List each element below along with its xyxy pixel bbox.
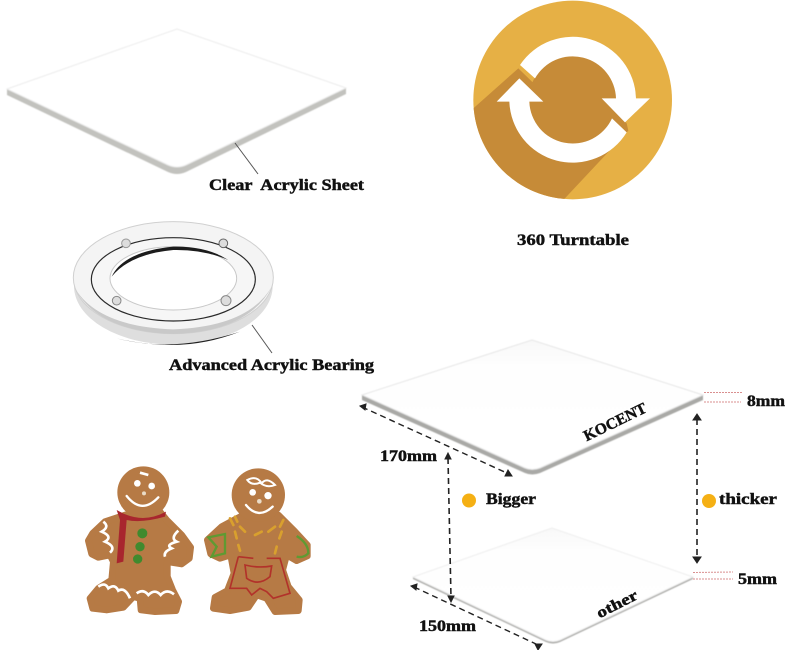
- arrow: 170mm width: [360, 404, 512, 476]
- label: 8mm: 8mm: [747, 393, 785, 410]
- label: 5mm: 5mm: [738, 571, 777, 588]
- panel: gingerbread cookies: [88, 466, 308, 612]
- label: other: other: [594, 587, 641, 622]
- leader line: bearing: [252, 325, 272, 353]
- bullet: bigger: [462, 494, 476, 508]
- panel: size comparison: [360, 340, 785, 650]
- panel: acrylic bearing: [73, 222, 374, 374]
- illustration: acrylic sheet: [7, 29, 346, 174]
- cookie: gingerbread man with apron: [207, 468, 308, 612]
- label: thicker: thicker: [719, 491, 777, 508]
- illustration: Kocent sheet 8mm: [362, 340, 703, 474]
- label: Kocent: KOCENT: [581, 400, 650, 445]
- panel: clear acrylic sheet: [7, 29, 365, 194]
- label: 360 turntable: 360 Turntable: [517, 232, 629, 249]
- arrow: height left: [445, 453, 454, 602]
- label: bigger: Bigger: [486, 491, 536, 508]
- label: advanced acrylic bearing: Advanced Acrylic Bearing: [169, 357, 374, 374]
- label: clear acrylic sheet: Clear Acrylic Sheet: [209, 177, 365, 194]
- label: 170mm: 170mm: [380, 448, 437, 465]
- icon: rotation arrows in circle: [473, 0, 672, 200]
- cookie: gingerbread man with scarf: [88, 466, 191, 612]
- leader line: sheet: [235, 143, 258, 174]
- bullet: thicker: [702, 494, 716, 508]
- arrow: height right: [693, 414, 701, 563]
- arrow: 150mm width: [411, 584, 542, 650]
- panel: 360 turntable: [460, 1, 672, 249]
- illustration: bearing ring: [73, 222, 273, 345]
- thickness markers: 8mm: [704, 392, 743, 402]
- label: 150mm: 150mm: [419, 618, 476, 635]
- illustration: other sheet 5mm: [413, 528, 693, 644]
- thickness markers: 5mm: [693, 572, 733, 579]
